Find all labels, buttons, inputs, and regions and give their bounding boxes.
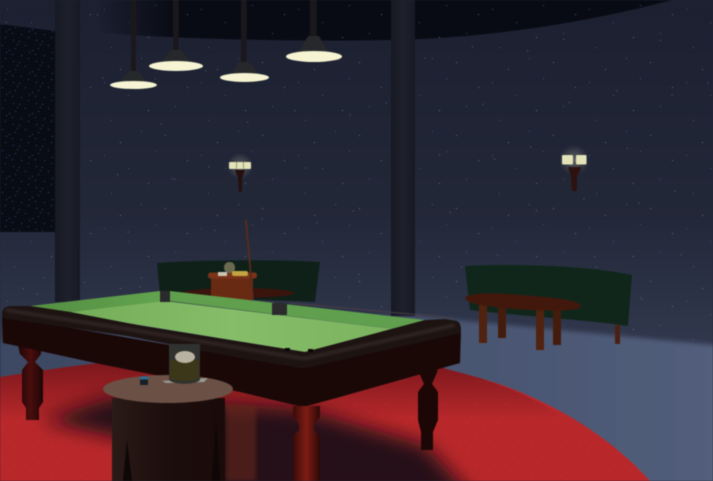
hanging lamp 4 [286, 0, 342, 62]
wall sconce left [227, 153, 253, 192]
ceiling [100, 0, 672, 41]
back wall [0, 0, 713, 360]
near pockets [285, 348, 290, 351]
dice [140, 376, 148, 385]
table rail [2, 306, 461, 368]
left side table with cabinet [182, 220, 294, 300]
table front leg [293, 406, 320, 481]
right table [465, 293, 581, 350]
hanging lamp 1 [110, 0, 157, 89]
rail highlight [6, 310, 455, 358]
floor [0, 316, 713, 481]
table felt [70, 301, 393, 352]
pillar centre [391, 0, 415, 316]
dark starry window panel [0, 24, 55, 232]
table far leg right [418, 370, 438, 450]
rug shadow under table [42, 398, 475, 481]
far pockets [160, 291, 170, 302]
table skirt [2, 316, 461, 407]
table far leg left [18, 345, 43, 420]
red rug [0, 363, 650, 481]
pillar left [55, 0, 80, 302]
right bench leg [615, 325, 620, 344]
stump side table [103, 375, 233, 481]
left bench [157, 260, 320, 302]
hanging lamp 2 [149, 0, 203, 71]
glow beside stump [226, 405, 256, 481]
far cushion [170, 291, 425, 329]
far edge line [290, 303, 453, 318]
right bench [465, 265, 632, 326]
hanging lamp 3 [220, 0, 269, 82]
wall sconce right [559, 145, 589, 191]
left cushion [30, 291, 160, 312]
billiard table [2, 291, 461, 407]
whisky glass [162, 344, 208, 384]
